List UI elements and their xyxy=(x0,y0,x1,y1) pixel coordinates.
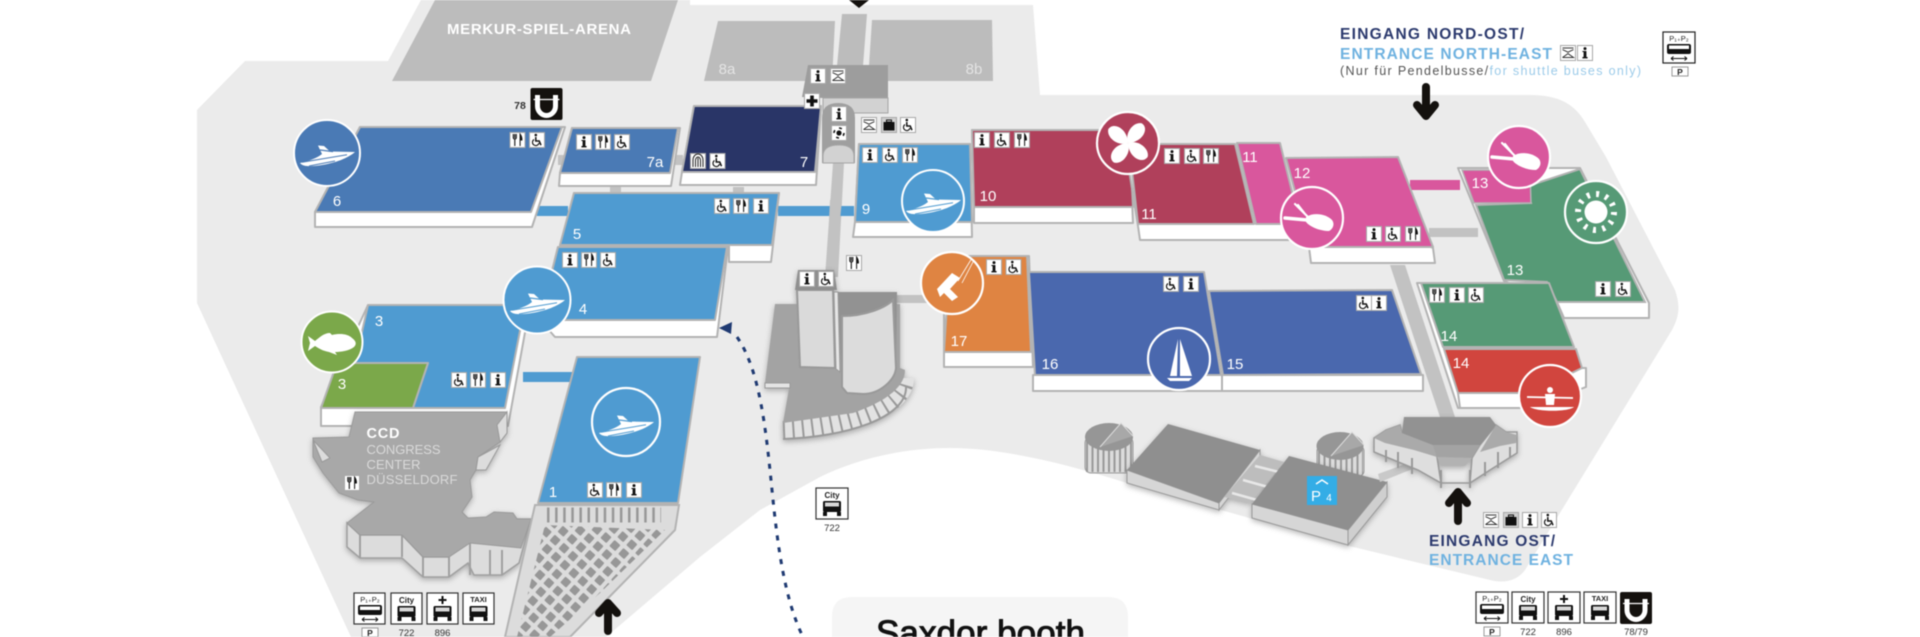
hall 1: 1 xyxy=(549,484,557,501)
hall 13 xyxy=(1458,168,1649,318)
north corridor xyxy=(837,14,867,66)
icon: shuttle bus north-east: P xyxy=(1677,67,1683,77)
central corridor over band xyxy=(829,200,842,220)
arrow: east entrance xyxy=(1449,492,1467,521)
hall 10: 10 xyxy=(980,188,996,205)
icon: fish xyxy=(302,312,362,372)
hall 13 pink section: 13 xyxy=(1472,175,1488,192)
arrow: south entrance xyxy=(599,603,617,631)
transport icons south-west: TAXI xyxy=(470,595,487,604)
building: CCD Congress Center Düsseldorf xyxy=(313,412,531,577)
bus stop 722 xyxy=(816,488,848,534)
hall 16: 16 xyxy=(1042,356,1058,373)
north entrance building xyxy=(802,65,888,113)
hall 8b xyxy=(868,20,993,81)
icon: bus stop 78: 78 xyxy=(514,100,526,112)
heading: north-east entrance: EINGANG NORD-OST/ xyxy=(1340,26,1525,43)
hall 3 green section xyxy=(321,363,428,408)
hall 12: 12 xyxy=(1294,165,1310,182)
Merkur-Spiel-Arena xyxy=(392,0,678,81)
transport icons south-west xyxy=(354,593,494,637)
hall 3: 3 xyxy=(375,313,383,330)
hall 11: 11 xyxy=(1141,206,1157,223)
icon: sun xyxy=(1565,181,1627,243)
east entrance service icons xyxy=(1484,512,1556,528)
blue connector bands xyxy=(523,206,854,382)
arrow: north-east entrance xyxy=(1417,87,1435,116)
icon: boat hall 6 xyxy=(294,120,360,186)
transport icons south-east: City xyxy=(1520,595,1536,604)
heading: east entrance xyxy=(1429,533,1574,569)
hall 11 pink section: 11 xyxy=(1242,149,1258,166)
bus stop 722: 722 xyxy=(824,523,840,534)
central building with towers xyxy=(765,270,906,439)
hall 9: 9 xyxy=(862,201,870,218)
transport icons south-east: P xyxy=(1489,627,1495,637)
callout: Saxdor booth xyxy=(832,597,1128,637)
hall 7a xyxy=(559,128,680,186)
heading: east entrance: ENTRANCE EAST xyxy=(1429,552,1574,569)
bus stop 722: City xyxy=(824,491,840,500)
service icons row xyxy=(862,118,916,132)
service tower xyxy=(822,103,855,163)
parking deck P4 xyxy=(1127,424,1387,545)
hall 12 xyxy=(1286,157,1435,263)
parking sign P4: P xyxy=(1311,488,1321,505)
heading: north-east entrance xyxy=(1340,26,1641,78)
pink connector band xyxy=(1410,180,1460,190)
icon: kite surfer xyxy=(921,252,983,314)
icon: diver hall 12 xyxy=(1281,187,1343,249)
exhibition ground xyxy=(197,0,1678,637)
icon: first aid xyxy=(804,94,820,108)
hall 5: 5 xyxy=(573,226,581,243)
hall 8b: 8b xyxy=(966,61,982,78)
icon: propeller xyxy=(1094,109,1162,177)
hall 17 xyxy=(944,256,1033,367)
icon: shuttle bus north-east: P₁₊P₂ xyxy=(1669,34,1689,43)
walkway to east entrance xyxy=(1378,460,1420,482)
parking sign P4: 4 xyxy=(1326,493,1332,504)
east entrance building xyxy=(1374,417,1517,488)
hall 11 pink section xyxy=(1237,143,1300,224)
icon: bus stop 78 xyxy=(514,88,562,120)
building: CCD Congress Center Düsseldorf: DÜSSELDORF xyxy=(366,472,458,487)
transport icons south-east: P₁₊P₂ xyxy=(1482,594,1502,603)
north entrance arrow tip xyxy=(849,0,869,8)
building: CCD Congress Center Düsseldorf: CCD xyxy=(366,426,400,442)
hall 15: 15 xyxy=(1227,356,1243,373)
central corridor xyxy=(825,163,844,277)
heading: north-east entrance: (Nur für Pendelbusse/for shuttle buses only) xyxy=(1340,64,1641,78)
forecourt with paving grid xyxy=(505,505,679,637)
hall 14 red xyxy=(1444,349,1586,408)
hall 16 xyxy=(1029,272,1221,375)
transport icons south-west: City xyxy=(399,596,415,605)
icon: boat hall 4 xyxy=(504,266,570,334)
hall 6 xyxy=(315,127,565,227)
icon: sailboat xyxy=(1148,328,1210,390)
building: CCD Congress Center Düsseldorf: CENTER xyxy=(366,457,420,472)
hall 6: 6 xyxy=(333,193,341,210)
hall 7a: 7a xyxy=(647,154,664,171)
parking sign P4 xyxy=(1307,476,1337,505)
hall 1 xyxy=(538,357,700,503)
icon: shuttle bus north-east xyxy=(1663,32,1695,77)
transport icons south-east: TAXI xyxy=(1592,594,1608,603)
building: CCD Congress Center Düsseldorf: CONGRESS xyxy=(366,442,441,457)
hall 13: 13 xyxy=(1507,262,1523,279)
heading: east entrance: EINGANG OST/ xyxy=(1429,533,1556,550)
icon: kayak xyxy=(1519,365,1581,427)
hall 14 red: 14 xyxy=(1453,355,1469,372)
hall 17: 17 xyxy=(951,333,967,350)
hall 3 xyxy=(321,305,530,426)
hall 4 xyxy=(540,247,728,337)
hall 14 green: 14 xyxy=(1441,328,1457,345)
hall 13 pink section xyxy=(1462,170,1531,203)
transport icons south-west: P₁₊P₂ xyxy=(360,595,380,604)
hall 11 xyxy=(1129,144,1311,240)
icon: diver hall 13 xyxy=(1488,126,1550,188)
heading: north-east entrance: ENTRANCE NORTH-EAST xyxy=(1340,46,1553,63)
hall 9 xyxy=(853,144,972,237)
hall 10 xyxy=(972,130,1133,223)
silo west xyxy=(1085,423,1133,473)
hall 15 xyxy=(1209,290,1421,391)
icon: restaurant xyxy=(846,256,862,270)
hall 4: 4 xyxy=(579,301,587,318)
hall 7: 7 xyxy=(800,154,808,171)
route to Saxdor booth xyxy=(719,322,803,637)
silo east xyxy=(1316,432,1364,476)
hall 3 green section: 3 xyxy=(338,376,346,393)
hall 8a xyxy=(704,21,835,81)
hall 8a: 8a xyxy=(719,61,736,78)
Merkur-Spiel-Arena: MERKUR-SPIEL-ARENA xyxy=(447,21,631,38)
hall 5 xyxy=(560,193,779,262)
hall 7 xyxy=(680,106,821,185)
hall 14 green xyxy=(1417,283,1574,408)
transport icons south-east xyxy=(1476,592,1652,637)
grey connectors xyxy=(558,155,1478,417)
halls 16 and 15 front xyxy=(1033,375,1423,391)
